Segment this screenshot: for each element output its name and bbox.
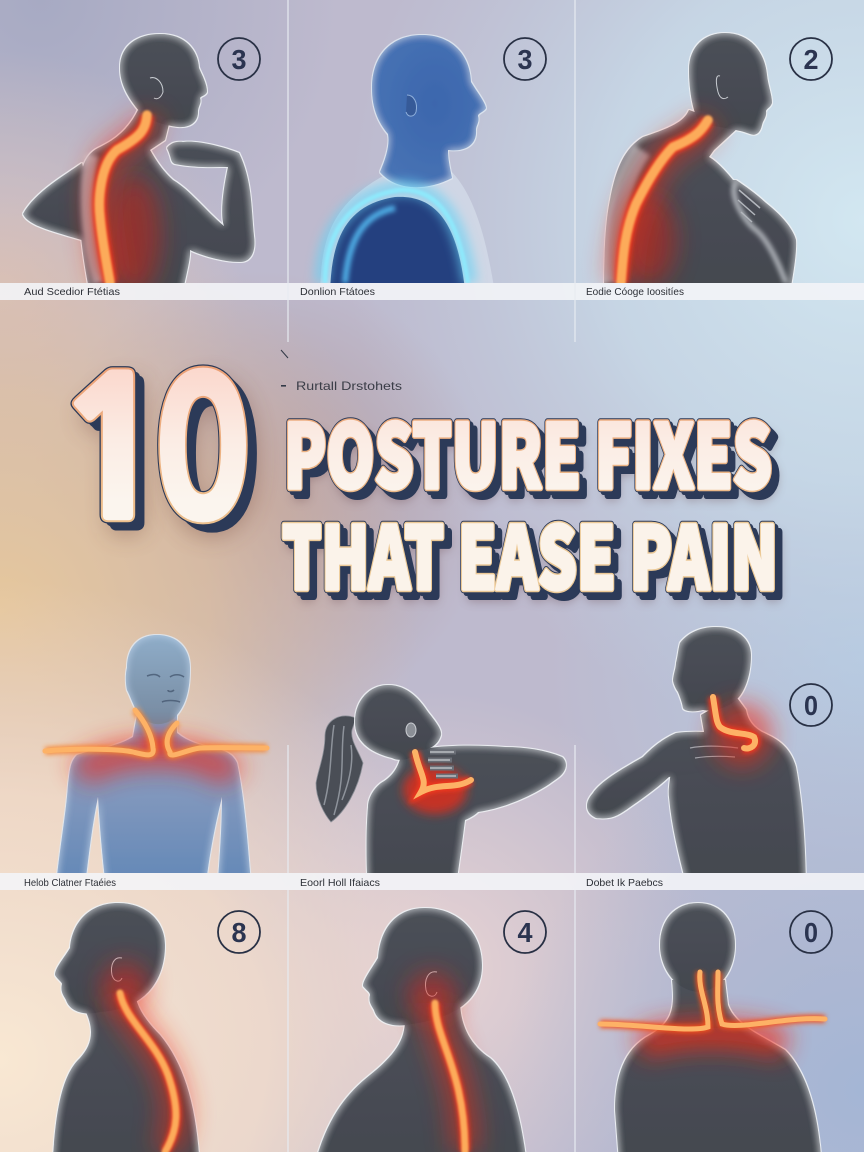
- arm and hand highlights: [734, 182, 786, 283]
- step number 8: [218, 911, 260, 953]
- step number 2: 2: [804, 44, 818, 75]
- figure 5 silhouette: [355, 685, 566, 895]
- step number 3: 3: [518, 44, 532, 75]
- panel 4: front blue figure with shoulder glow: [45, 635, 267, 895]
- title numeral 10: 1: [60, 360, 178, 550]
- figure 1 silhouette: [23, 34, 254, 305]
- panel 2: blue profile figure, badge 3: [320, 35, 546, 300]
- step number 0: 0: [804, 917, 818, 948]
- panel 8: left profile neck figure, badge 4: [312, 908, 546, 1152]
- ear 8: [425, 972, 437, 996]
- figure 2 silhouette: [320, 35, 496, 300]
- panel 3: spine profile figure, badge 2: [604, 33, 832, 305]
- subtitle: Rurtall Drstohets: [296, 379, 402, 393]
- title numeral 10: 0: [157, 360, 255, 550]
- step number 0: [790, 911, 832, 953]
- panel 9: rear figure with shoulder line, badge 0: [600, 903, 832, 1152]
- ear 5: [406, 723, 416, 737]
- figure 4 silhouette: [55, 635, 252, 895]
- step number 8: 8: [232, 917, 246, 948]
- step number 0: [790, 684, 832, 726]
- panel 1: back and neck figure, badge 3: [23, 34, 260, 305]
- step number 3: [218, 38, 260, 80]
- title numeral 10: [55, 356, 259, 558]
- figure 9 silhouette: [615, 903, 822, 1152]
- step number 4: 4: [518, 917, 533, 948]
- step number 4: [504, 911, 546, 953]
- title numeral 10: 0: [152, 356, 250, 546]
- title numeral 10: 1: [55, 356, 173, 546]
- caption 3: Eodie Cóoge Ioositíes: [586, 286, 684, 298]
- caption 2: Donlion Ftátoes: [300, 286, 375, 298]
- middle caption strip: [0, 873, 864, 890]
- title numeral 10: 1: [64, 364, 182, 554]
- ear 1: [150, 78, 163, 99]
- title numeral 10: 0: [152, 356, 250, 546]
- caption 1: Aud Scedior Ftétias: [24, 286, 120, 298]
- title numeral 10: 1: [55, 356, 173, 546]
- title numeral 10: 0: [152, 356, 250, 546]
- collar glow: [45, 710, 267, 778]
- ear 7: [111, 958, 122, 981]
- spine glow: [612, 120, 708, 285]
- panel 5: ponytail figure holding neck: [316, 685, 566, 895]
- caption 4: Helob Clatner Ftaéies: [24, 877, 116, 889]
- step number 2: [790, 38, 832, 80]
- ear 3: [716, 76, 728, 99]
- title numeral 10: 0: [161, 364, 259, 554]
- figure 8 silhouette: [312, 908, 528, 1152]
- spine glow: [408, 971, 465, 1152]
- panel 7: left profile back figure, badge 8: [52, 903, 260, 1152]
- ponytail: [316, 716, 363, 822]
- caption 6: Dobet Ik Paebcs: [586, 877, 663, 889]
- step number 3: [504, 38, 546, 80]
- top caption strip: [0, 283, 864, 300]
- figure 3 silhouette: [604, 33, 796, 305]
- title numeral 10: 0: [160, 368, 258, 558]
- shoulder glow: [712, 697, 772, 767]
- spine glow: [101, 961, 176, 1152]
- title numeral 10: 1: [55, 356, 173, 546]
- title numeral 10: 1: [63, 368, 181, 558]
- caption 5: Eoorl Holl Ifaiacs: [300, 877, 380, 889]
- face 4: [147, 675, 184, 702]
- step number 0: 0: [804, 690, 818, 721]
- shoulder line glow: [600, 972, 825, 1045]
- neck glow: [403, 752, 471, 814]
- spine glow: [88, 115, 161, 295]
- figure 7 silhouette: [52, 903, 200, 1152]
- step number 3: 3: [232, 44, 246, 75]
- glowing shoulder arc: [322, 188, 470, 300]
- hand 6 detail: [690, 746, 738, 758]
- panel 6: chest figure with hand on shoulder, badge 0: [587, 627, 832, 895]
- figure 6 silhouette: [587, 627, 806, 895]
